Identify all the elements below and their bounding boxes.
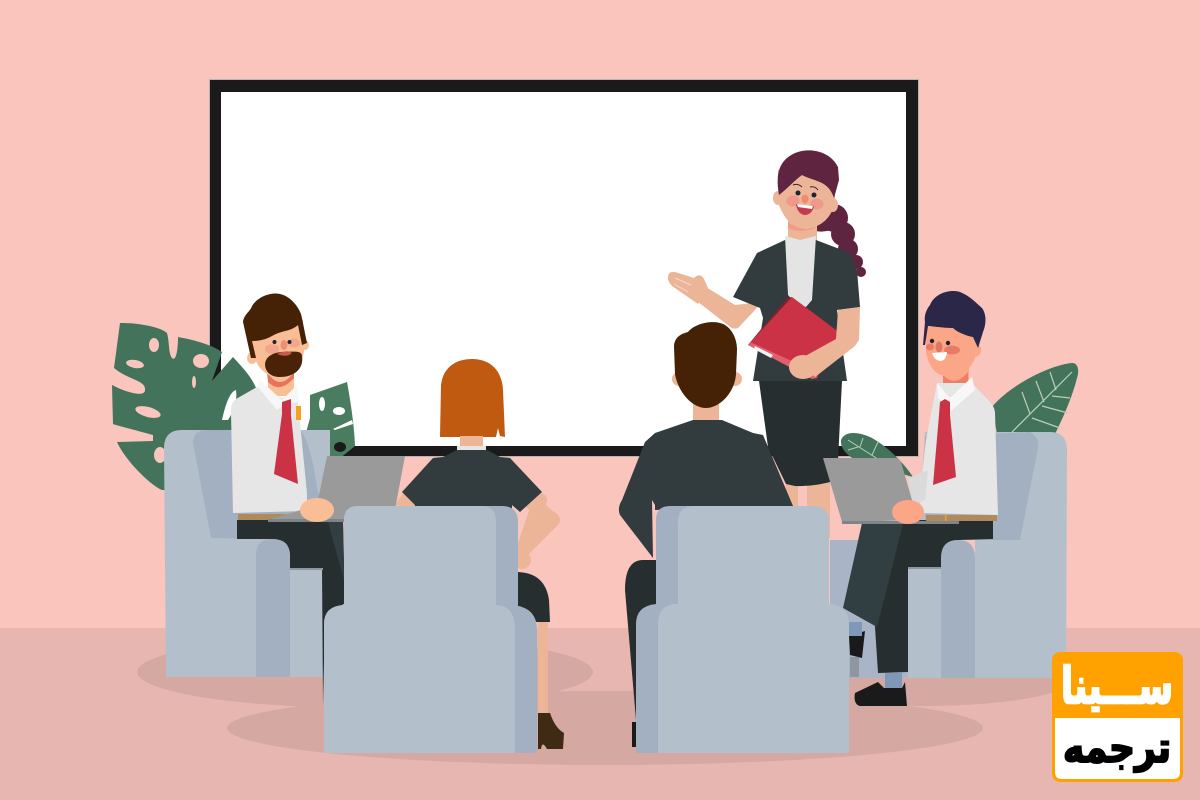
trousers xyxy=(237,520,345,705)
skirt xyxy=(515,572,550,622)
head xyxy=(773,191,783,205)
neck and ears xyxy=(693,398,719,424)
hair xyxy=(674,322,737,408)
tie xyxy=(274,399,298,484)
legs xyxy=(786,478,798,538)
blouse xyxy=(785,236,816,307)
front armchair right xyxy=(636,506,849,753)
laptop left xyxy=(268,456,405,522)
belt xyxy=(238,514,306,520)
man with beard left xyxy=(231,294,345,705)
pointing arm xyxy=(698,287,761,329)
plant right xyxy=(841,363,1078,477)
belt xyxy=(926,515,997,521)
armchair left xyxy=(164,430,330,677)
logo word: tarjome: ترجمه xyxy=(1063,723,1171,773)
near foot xyxy=(885,673,902,688)
tie xyxy=(933,399,956,485)
man smiling right xyxy=(843,291,998,706)
skirt xyxy=(759,381,842,486)
front armchair left xyxy=(324,506,537,753)
trousers xyxy=(870,520,993,673)
top xyxy=(402,450,542,520)
high heel xyxy=(538,713,564,749)
man seated from behind xyxy=(619,322,793,747)
head xyxy=(943,368,969,394)
holding arm xyxy=(798,307,860,377)
shirt xyxy=(231,387,307,513)
projection screen xyxy=(209,79,919,457)
floor xyxy=(0,628,1200,800)
far foot xyxy=(850,657,859,677)
armchair right xyxy=(830,432,1067,678)
logo xyxy=(1052,652,1183,782)
hair xyxy=(440,359,505,437)
jacket xyxy=(733,240,860,381)
plant left xyxy=(112,323,355,490)
braid xyxy=(813,204,866,277)
pen xyxy=(296,406,301,420)
neck xyxy=(788,218,817,242)
trousers xyxy=(625,560,660,720)
shirt xyxy=(920,383,998,515)
laptop right xyxy=(823,458,959,524)
presenter woman xyxy=(668,150,866,538)
head xyxy=(268,368,294,396)
woman seated from behind xyxy=(395,359,564,749)
leg xyxy=(538,622,548,722)
jacket xyxy=(619,420,793,558)
arm xyxy=(523,500,553,550)
folder xyxy=(748,297,840,379)
